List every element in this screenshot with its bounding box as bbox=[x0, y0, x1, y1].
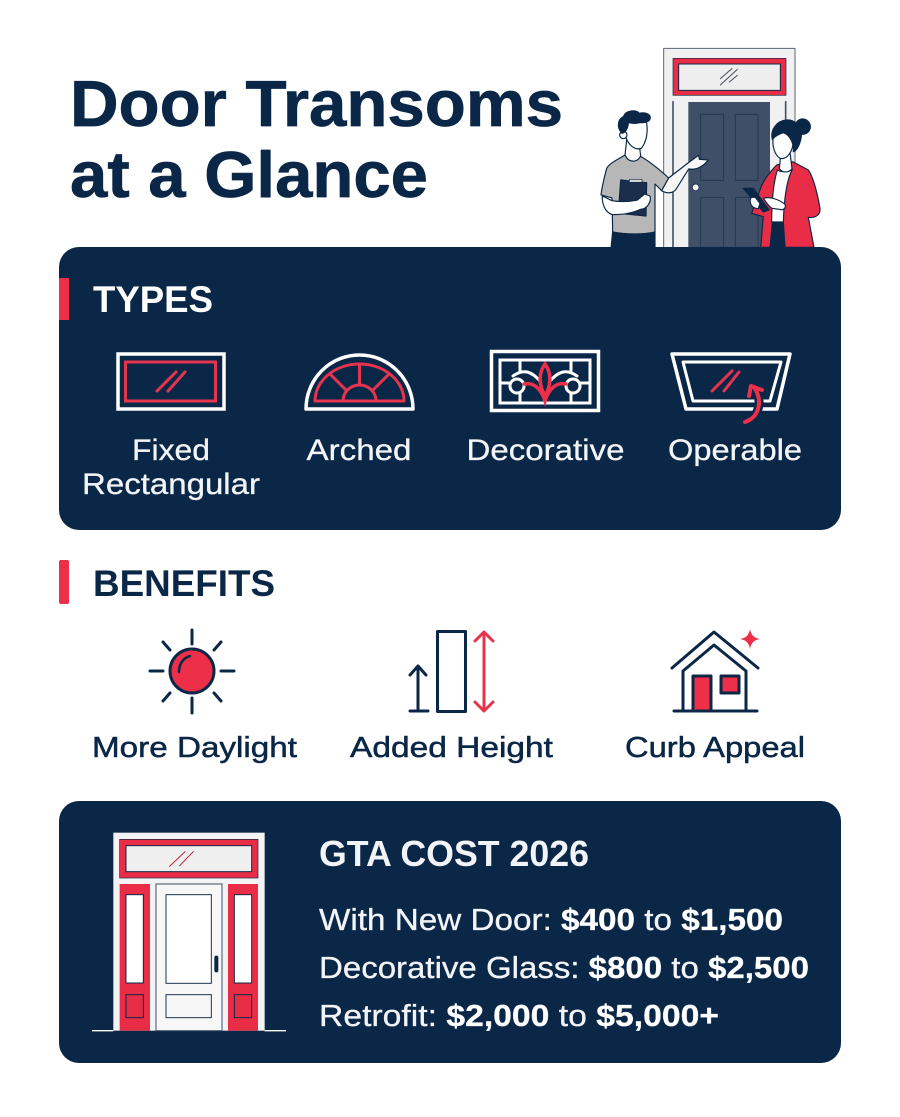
illustration: door with two people bbox=[601, 48, 820, 248]
woman with tablet bbox=[743, 119, 820, 247]
icon: added height bbox=[410, 632, 493, 712]
title: at a Glance bbox=[70, 138, 428, 211]
icon: house bbox=[672, 629, 760, 711]
icon: decorative bbox=[492, 352, 598, 410]
cost line: with new door: With New Door: $400 to $1,500 bbox=[319, 902, 783, 937]
man with clipboard bbox=[601, 111, 708, 248]
heading: types: TYPES bbox=[93, 279, 213, 320]
section: benefits bbox=[59, 560, 805, 764]
cost line: decorative glass: Decorative Glass: $800 to $2,500 bbox=[319, 950, 809, 985]
icon: operable bbox=[672, 354, 790, 422]
label: operable: Operable bbox=[668, 434, 802, 467]
cost line: retrofit: Retrofit: $2,000 to $5,000+ bbox=[319, 998, 719, 1033]
icon: sun bbox=[150, 630, 234, 713]
illustration: door with transom and sidelights bbox=[92, 833, 286, 1031]
label: fixed rectangular: Rectangular bbox=[82, 468, 260, 501]
label: more daylight: More Daylight bbox=[92, 732, 297, 764]
title bbox=[70, 67, 563, 211]
label: curb appeal: Curb Appeal bbox=[625, 732, 805, 764]
label: arched: Arched bbox=[306, 434, 412, 467]
accent bar: benefits bbox=[59, 560, 69, 604]
label: decorative: Decorative bbox=[466, 434, 624, 467]
heading: benefits: BENEFITS bbox=[93, 563, 275, 604]
icon: fixed rectangular bbox=[118, 354, 224, 409]
label: added height: Added Height bbox=[350, 732, 553, 764]
panel: types bbox=[59, 247, 841, 530]
label: fixed rectangular: Fixed bbox=[132, 434, 210, 467]
accent bar: types bbox=[59, 278, 69, 320]
door and transom bbox=[664, 48, 795, 248]
title: Door Transoms bbox=[70, 67, 563, 140]
heading: gta cost: GTA COST 2026 bbox=[319, 833, 589, 874]
icon: arched bbox=[306, 355, 413, 409]
panel: cost bbox=[59, 801, 841, 1063]
